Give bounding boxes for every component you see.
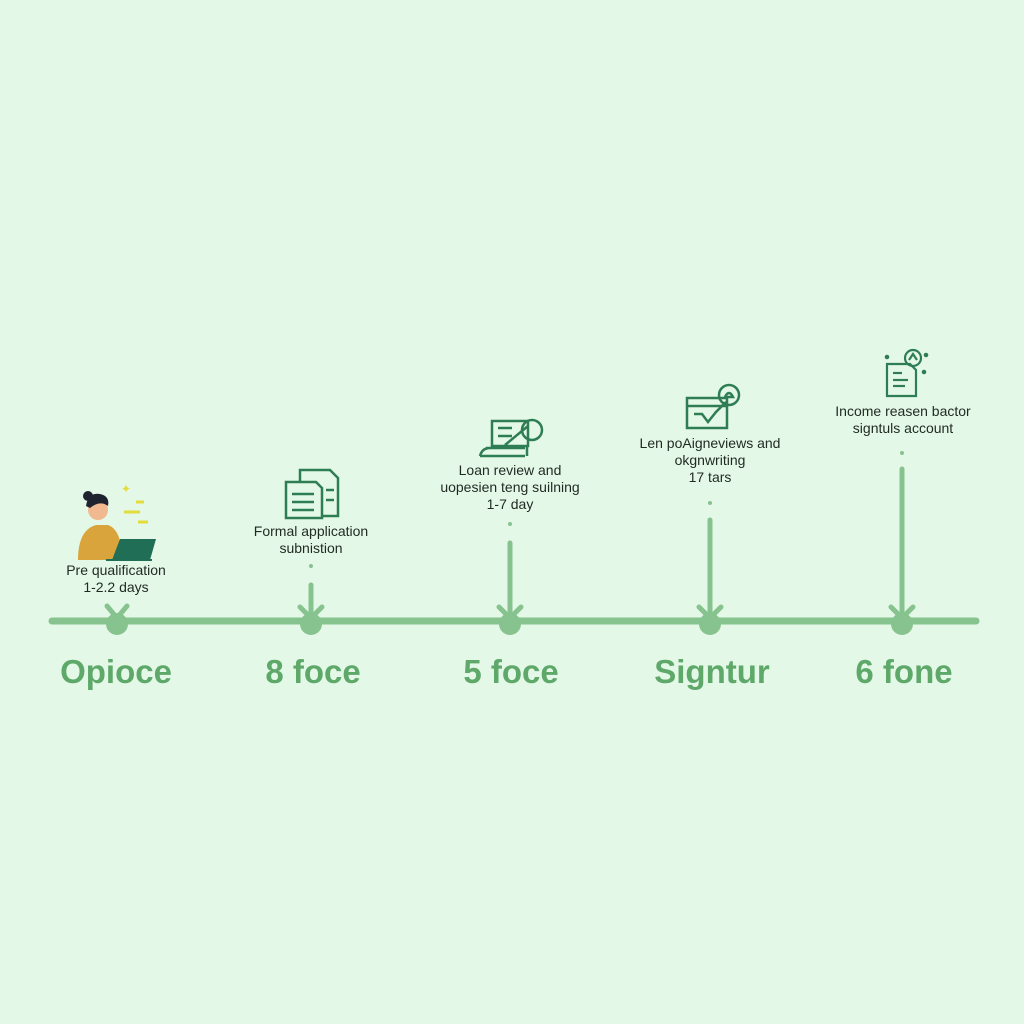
- node 1: [106, 606, 128, 635]
- text: step 1: Pre qualification: [66, 562, 166, 578]
- icon: chart with badge: [687, 385, 739, 428]
- text: step 2: Formal application: [254, 523, 368, 539]
- text: step 5: signtuls account: [853, 420, 953, 436]
- text: step 3: 1-7 day: [487, 496, 533, 512]
- label 2: 8 foce: [265, 653, 361, 690]
- text: step 1: [66, 562, 166, 595]
- icon: documents: [286, 470, 338, 518]
- text: step 3: Loan review and: [459, 462, 561, 478]
- text: step 2: [254, 523, 368, 556]
- text: step 3: [440, 462, 580, 512]
- node 3 arrow: [499, 522, 521, 635]
- text: step 3: uopesien teng suilning: [440, 479, 580, 495]
- text: step 4: okgnwriting: [675, 452, 745, 468]
- icon: person with laptop: ✦: [121, 482, 131, 496]
- icon: loan review: [480, 420, 542, 456]
- text: step 2: subnistion: [279, 540, 343, 556]
- node 2 arrow: [300, 564, 322, 635]
- icon: person with laptop: [78, 482, 156, 560]
- icon: signed document: [886, 350, 927, 396]
- node 4 arrow: [699, 501, 721, 635]
- text: step 1: 1-2.2 days: [83, 579, 149, 595]
- text: step 5: [835, 403, 971, 436]
- text: step 5: Income reasen bactor: [835, 403, 971, 419]
- text: step 4: 17 tars: [689, 469, 731, 485]
- label 5: 6 fone: [855, 653, 953, 690]
- label 4: Signtur: [654, 653, 770, 690]
- text: step 4: [640, 435, 780, 485]
- text: step 4: Len poAigneviews and: [640, 435, 780, 451]
- label 3: 5 foce: [463, 653, 559, 690]
- node 5 arrow: [891, 451, 913, 635]
- label 1: Opioce: [60, 653, 172, 690]
